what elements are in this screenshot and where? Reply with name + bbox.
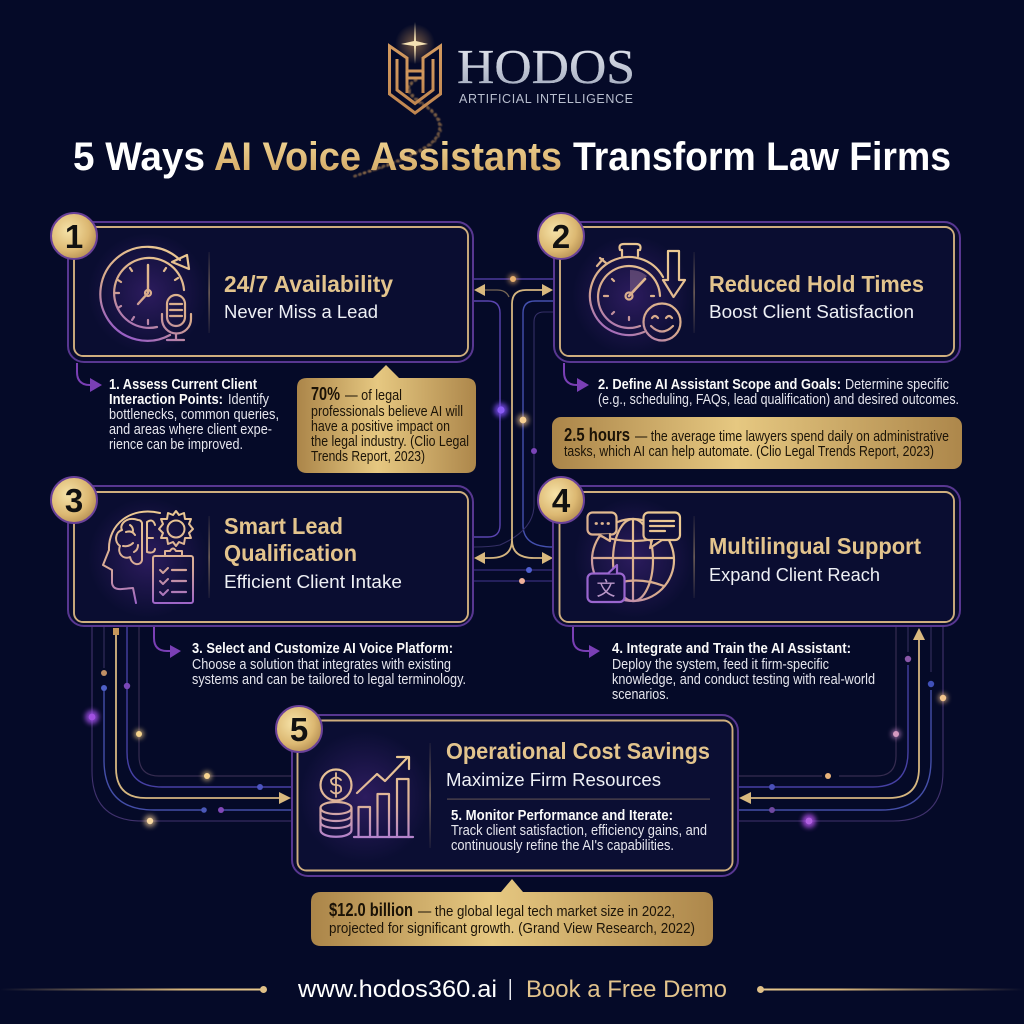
arrow: step 3	[154, 627, 181, 658]
title: 5 Ways	[73, 135, 205, 179]
badge 1: 1	[65, 218, 83, 255]
connectors: centre between cards	[474, 279, 553, 581]
heading: 24/7 Availability: 24/7 Availability	[224, 271, 393, 297]
callout: 2.5 hours	[552, 417, 962, 469]
text block: step 1: 1. Assess Current Client	[109, 376, 257, 393]
callout: 2.5 hours: tasks, which AI can help automate. (Clio Legal Trends Report, 2023)	[564, 443, 934, 460]
logo wordmark: HODOS	[457, 39, 635, 94]
text block: step 4	[612, 640, 875, 703]
footer: www.hodos360.ai	[297, 976, 497, 1003]
badge 2	[538, 213, 584, 259]
text block: step 3: systems and can be tailored to legal terminology.	[192, 671, 466, 688]
panel: card 2	[554, 222, 960, 362]
text block: step 2	[598, 376, 959, 408]
callout: $12.0 billion	[311, 879, 713, 946]
text block: step 5: continuously refine the AI's capabilities.	[451, 837, 674, 854]
callout: 70%: the legal industry. (Clio Legal	[311, 433, 469, 450]
divider	[694, 252, 695, 333]
logo	[352, 22, 635, 177]
icon: logo star	[395, 22, 435, 64]
callout: 70%: 70%	[311, 384, 340, 404]
connector nodes right	[739, 628, 948, 828]
subheading: Efficient Client Intake	[224, 571, 402, 592]
heading: Reduced Hold Times: Reduced Hold Times	[709, 271, 924, 297]
text block: step 5	[451, 807, 707, 854]
badge 4: 4	[552, 482, 571, 519]
title: Transform Law Firms	[573, 135, 951, 179]
icon: logo swoosh	[352, 80, 441, 177]
text block: step 1: and areas where client expe-	[109, 421, 272, 438]
heading: Operational Cost Savings: Operational Cost Savings	[446, 738, 710, 764]
callout: 70%	[297, 365, 476, 473]
callout: 70%: Trends Report, 2023)	[311, 448, 425, 465]
footer: Book a Free Demo	[526, 976, 727, 1003]
title	[73, 135, 951, 179]
panel: card 1	[68, 222, 473, 362]
text block: step 4: 4. Integrate and Train the AI Assistant:	[612, 640, 851, 657]
badge 5: 5	[290, 711, 308, 748]
connectors: right lower	[738, 627, 943, 821]
footer	[0, 976, 1024, 1003]
divider	[694, 516, 695, 598]
connectors: left lower	[92, 627, 291, 821]
icon: coins and growth chart	[320, 757, 413, 837]
subheading: Maximize Firm Resources	[446, 769, 661, 790]
icon: clock and microphone	[100, 247, 191, 341]
text block: step 1: rience can be improved.	[109, 436, 243, 453]
badge 2: 2	[552, 218, 570, 255]
text block: step 5: 5. Monitor Performance and Iterate:	[451, 807, 673, 824]
icon: globe with speech bubbles	[588, 512, 680, 602]
callout: $12.0 billion: $12.0 billion	[329, 900, 413, 920]
callout: 70%: have a positive impact on	[311, 418, 450, 435]
title: AI Voice Assistants	[214, 135, 562, 179]
panel: card 4	[553, 486, 960, 626]
icon: connector arrowheads centre	[474, 284, 553, 564]
divider	[208, 516, 210, 598]
text block: step 5: Track client satisfaction, efficiency gains, and	[451, 822, 707, 839]
logo tagline: ARTIFICIAL INTELLIGENCE	[459, 92, 633, 106]
text block: step 3: 3. Select and Customize AI Voice Platform:	[192, 640, 453, 657]
heading: Smart Lead Qualification: Qualification	[224, 540, 357, 566]
panel: card 3	[68, 486, 473, 626]
text block: step 4: Deploy the system, feed it firm-specific	[612, 656, 829, 673]
icon: stopwatch with smile	[590, 244, 685, 340]
text block: step 2: (e.g., scheduling, FAQs, lead qualification) and desired outcomes.	[598, 391, 959, 408]
text block: step 3	[192, 640, 466, 688]
text block: step 4: scenarios.	[612, 686, 669, 703]
text block: step 1	[109, 376, 279, 453]
badge 5	[276, 706, 322, 752]
arrow: step 2	[564, 363, 589, 392]
badge 3: 3	[65, 482, 83, 519]
icon: translate character: 文	[596, 574, 616, 601]
text block: step 2: 2. Define AI Assistant Scope and Goals:	[598, 376, 841, 393]
badge 1	[51, 213, 97, 259]
subheading: Boost Client Satisfaction	[709, 301, 914, 322]
subheading: Never Miss a Lead	[224, 301, 378, 322]
text block: step 2: Determine specific	[845, 376, 949, 393]
text block: step 4: knowledge, and conduct testing with real-world	[612, 671, 875, 688]
text block: step 1: Identify	[228, 391, 269, 408]
text block: step 1: Interaction Points:	[109, 391, 223, 408]
connector nodes left	[85, 628, 291, 827]
badge 4	[538, 477, 584, 523]
callout: $12.0 billion: projected for significant growth. (Grand View Research, 2022)	[329, 920, 695, 937]
heading: Smart Lead Qualification	[224, 513, 357, 566]
icon: head with gear and clipboard	[103, 511, 193, 603]
connector nodes centre	[494, 274, 537, 584]
arrow: step 1	[77, 363, 102, 392]
subheading: Expand Client Reach	[709, 564, 880, 585]
badge 3	[51, 477, 97, 523]
heading: Smart Lead Qualification: Smart Lead	[224, 513, 343, 539]
heading: Multilingual Support: Multilingual Support	[709, 533, 921, 559]
callout: 2.5 hours: — the average time lawyers spend daily on administrative	[635, 428, 949, 445]
panel: card 5	[292, 715, 738, 876]
callout: 70%: — of legal	[345, 387, 402, 404]
callout: 2.5 hours: 2.5 hours	[564, 425, 630, 445]
divider	[430, 743, 431, 848]
icon: logo shield	[390, 46, 440, 113]
callout: $12.0 billion: — the global legal tech market size in 2022,	[418, 903, 675, 920]
callout: 70%: professionals believe AI will	[311, 403, 463, 420]
text block: step 1: bottlenecks, common queries,	[109, 406, 279, 423]
text block: step 3: Choose a solution that integrates with existing	[192, 656, 451, 673]
arrow: step 4	[573, 627, 600, 658]
divider	[208, 252, 210, 333]
